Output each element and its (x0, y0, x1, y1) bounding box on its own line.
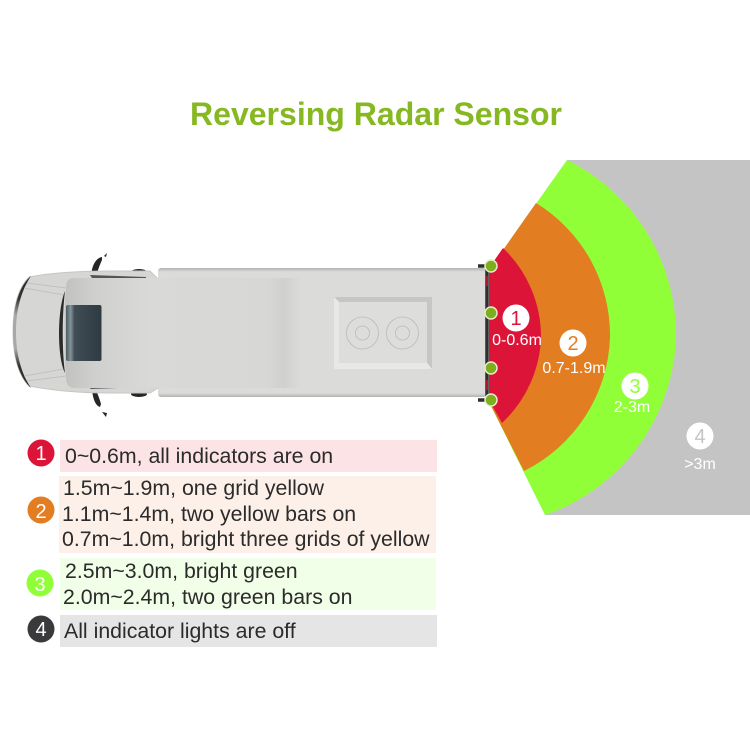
zone 1: 0-0.6m (489, 248, 541, 423)
badge 2: 2 (35, 501, 47, 523)
rear bumper (478, 266, 487, 400)
legend row 2 (28, 476, 436, 553)
text 4: All indicator lights are off (64, 619, 296, 643)
windshield curve (59, 291, 65, 373)
badge 3 (26, 570, 54, 596)
text 2 (62, 476, 430, 551)
text 3: 2.0m~2.4m, two green bars on (63, 585, 352, 609)
text 2: 1.1m~1.4m, two yellow bars on (62, 502, 356, 526)
zone label 3: 2-3m (614, 399, 650, 416)
zone label 1 (492, 304, 542, 349)
rear lights (486, 276, 488, 390)
text 1: 0~0.6m, all indicators are on (65, 444, 333, 468)
zone 3: 2-3m (489, 160, 676, 515)
text 2: 1.5m~1.9m, one grid yellow (63, 476, 325, 500)
badge 4: 4 (35, 619, 47, 641)
zone label 4: >3m (684, 456, 716, 473)
text 2: 0.7m~1.0m, bright three grids of yellow (62, 527, 430, 551)
cab roof (64, 278, 300, 388)
hood lines (24, 283, 66, 381)
cargo body side rail (158, 268, 486, 397)
zone label 1: 0-0.6m (492, 332, 542, 349)
badge 3: 3 (34, 574, 46, 596)
text 3 (63, 559, 352, 609)
hatch panel (334, 297, 432, 369)
zone label 1: 1 (510, 308, 522, 330)
zone label 3: 3 (629, 376, 641, 398)
zone label 4: 4 (694, 426, 706, 448)
text 3: 2.5m~3.0m, bright green (65, 559, 298, 583)
icon: windshield (66, 305, 102, 361)
zone 4: beyond 3m (545, 160, 750, 515)
legend row 3 (26, 558, 436, 610)
title: Reversing Radar Sensor (190, 96, 562, 132)
icon: vent pair (346, 317, 418, 349)
zone label 4 (684, 422, 716, 473)
radar zones (489, 160, 750, 515)
zone label 2: 2 (567, 333, 579, 355)
zone label 2: 0.7-1.9m (542, 360, 606, 377)
badge 2 (28, 496, 54, 524)
sensors (485, 260, 497, 406)
badge 4 (28, 616, 54, 642)
zone label 3 (614, 372, 650, 416)
badge 1: 1 (35, 443, 47, 465)
icon: bumper (13, 276, 31, 388)
cab body (13, 271, 158, 393)
legend row 1 (28, 440, 437, 472)
icon: mirrors (91, 253, 147, 417)
truck (13, 253, 487, 417)
legend row 4 (28, 615, 437, 647)
zone 2: 0.7-1.9m (489, 203, 610, 471)
zone label 2 (542, 330, 606, 377)
badge 1 (28, 440, 54, 466)
side windows (90, 275, 146, 389)
